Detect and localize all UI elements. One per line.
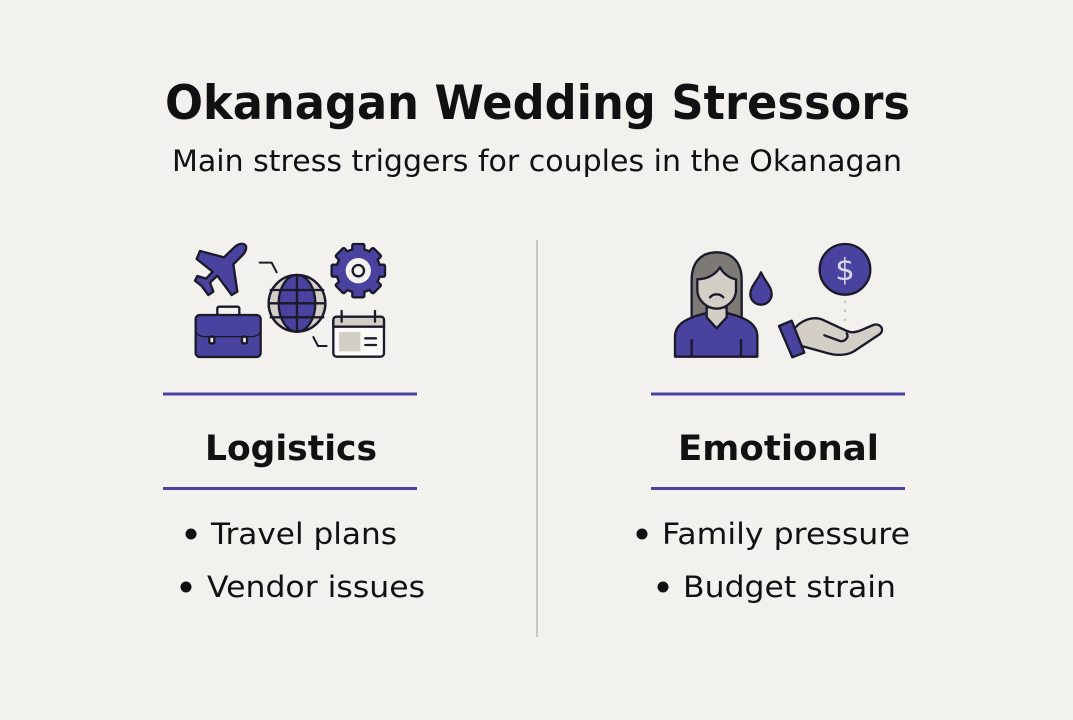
list: logistics items: Vendor issues (207, 570, 425, 604)
icon: dollar coin (820, 244, 870, 295)
list: emotional items: Budget strain (683, 570, 896, 604)
icon: gear (332, 244, 385, 297)
logistics icon cluster (195, 244, 385, 357)
icon: briefcase (196, 307, 261, 357)
heading: logistics: Logistics (205, 429, 377, 469)
icon: open hand (779, 318, 882, 357)
icon: airplane (195, 244, 246, 295)
icon: stressed woman (675, 252, 757, 357)
icon: globe (269, 275, 325, 332)
heading: emotional: Emotional (678, 429, 879, 469)
list: logistics items (180, 517, 425, 604)
connector arrows (260, 263, 327, 346)
panel: emotional (636, 244, 910, 604)
emotional icon cluster (675, 244, 882, 357)
icon: dollar coin: $ (835, 253, 855, 288)
subtitle: Main stress triggers for couples in the Okanagan (172, 144, 902, 178)
dotted line (841, 302, 848, 322)
icon: teardrop (750, 272, 772, 305)
icon: calendar (333, 311, 384, 357)
panel: logistics (163, 244, 425, 604)
list: logistics items: Travel plans (210, 517, 397, 551)
list: emotional items: Family pressure (662, 517, 910, 551)
title: Okanagan Wedding Stressors (165, 76, 910, 131)
list: emotional items (636, 517, 910, 604)
